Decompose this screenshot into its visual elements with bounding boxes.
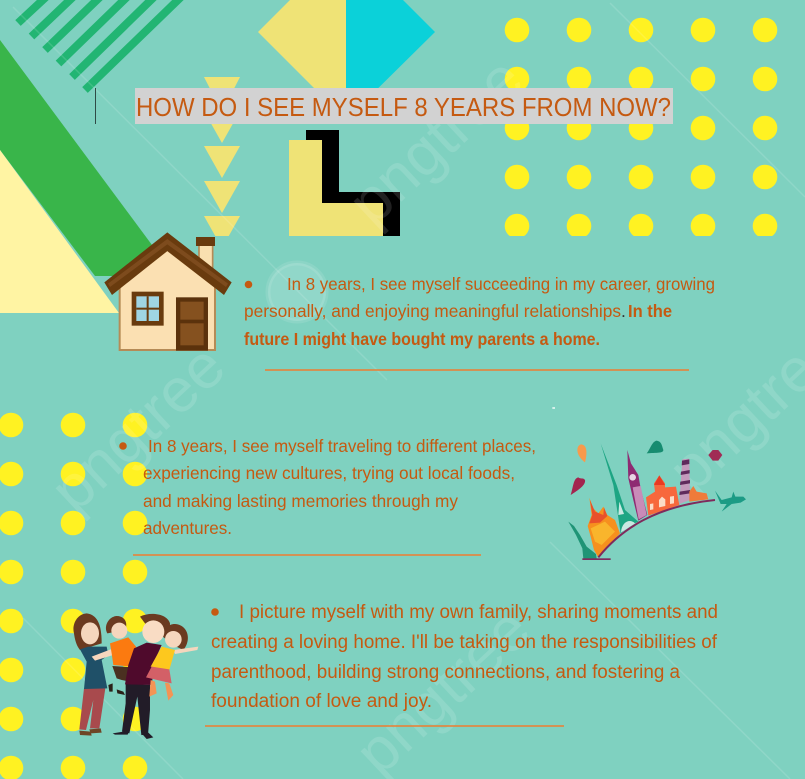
text block: family: I picture myself with my own family, sharing moments and [239, 602, 718, 623]
text block: family: creating a loving home. I'll be taking on the responsibilities of [211, 632, 718, 653]
watermark overlay: pngtree [37, 331, 238, 525]
decorative green stripes [18, 0, 181, 90]
tower of pisa [679, 459, 690, 504]
flower maroon [708, 450, 722, 461]
roof [104, 232, 232, 295]
divider 1 [265, 369, 689, 371]
left dot grid [0, 413, 147, 779]
title: HOW DO I SEE MYSELF 8 YEARS FROM NOW? [136, 94, 671, 122]
black L shape [306, 130, 400, 236]
watermark overlay: pngtree [335, 44, 536, 238]
yellow kite half [258, 0, 346, 120]
text block: travel: In 8 years, I see myself traveling to different places, [148, 436, 536, 456]
airplane [715, 491, 746, 512]
icon: house [104, 232, 232, 351]
text block: career and home: personally, and enjoying meaningful relationships [244, 301, 621, 321]
text block: travel: and making lasting memories through my [143, 491, 458, 511]
eiffel tower [601, 443, 638, 533]
big ben [627, 450, 647, 521]
arc ground [598, 500, 715, 557]
yellow L shape [289, 140, 383, 236]
balloon orange [577, 444, 586, 462]
chimney [196, 237, 215, 272]
divider 3 [205, 725, 564, 727]
kremlin [588, 498, 620, 557]
text block: travel: experiencing new cultures, trying out local foods, [143, 463, 515, 483]
window [132, 292, 164, 326]
text block: family: foundation of love and joy. [211, 691, 432, 712]
woman [73, 613, 118, 736]
door [176, 297, 208, 351]
colosseum [689, 486, 708, 502]
illustration: world landmarks [552, 407, 746, 560]
balloon red [571, 477, 585, 495]
text block: travel: adventures. [143, 518, 232, 538]
cloud teal [647, 441, 663, 453]
text block: career and home [244, 274, 715, 349]
cyan kite half [346, 0, 435, 120]
text block: career and home: In 8 years, I see myself succeeding in my career, growing [287, 274, 715, 294]
house body [120, 250, 215, 350]
text block: career and home: . [621, 301, 626, 321]
cursor line [94, 88, 96, 124]
green diagonal band [0, 40, 152, 276]
pale yellow triangle [0, 150, 119, 313]
girl [146, 624, 198, 701]
small white speck [552, 407, 555, 409]
boy [106, 616, 136, 695]
text block: family: parenthood, building strong connections, and fostering a [211, 662, 680, 683]
statue of liberty [568, 522, 597, 559]
text block: career and home: In the [628, 301, 672, 321]
triangle column [204, 77, 240, 248]
man [113, 614, 170, 739]
taj mahal [646, 475, 679, 516]
text block: career and home: future I might have bought my parents a home. [244, 329, 600, 349]
top right dot grid [505, 18, 777, 238]
illustration: family [73, 613, 198, 739]
divider 2 [133, 554, 481, 556]
text block: travel [119, 436, 536, 538]
text block: family [211, 602, 718, 712]
